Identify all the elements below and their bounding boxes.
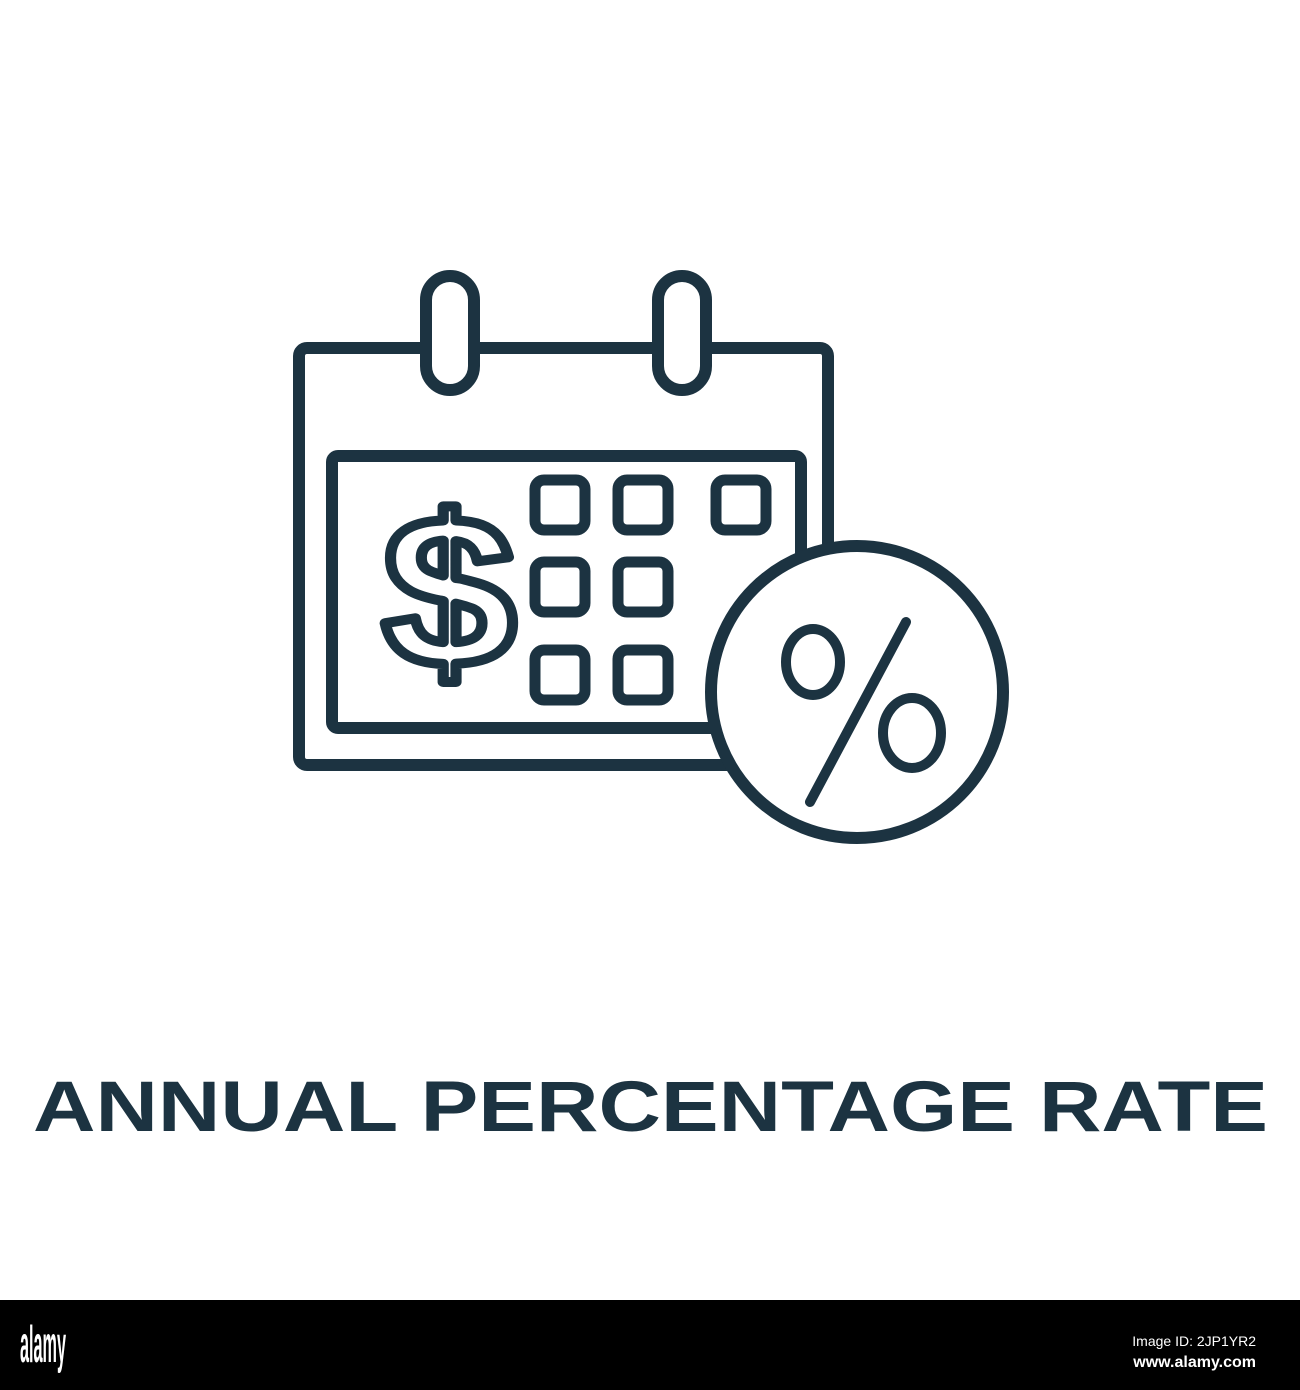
calendar body bbox=[299, 348, 828, 765]
icon: percent circle bbox=[711, 546, 1003, 838]
footer image id: Image ID: 2JP1YR2 bbox=[1132, 1333, 1256, 1349]
calendar inner panel bbox=[332, 456, 801, 728]
icon: dollar sign: $ bbox=[382, 472, 516, 712]
footer bar: alamy bbox=[20, 1316, 66, 1374]
date squares grid bbox=[535, 480, 766, 700]
title: ANNUAL PERCENTAGE RATE bbox=[33, 1068, 1268, 1147]
footer bar bbox=[0, 1300, 1300, 1390]
calendar rings bbox=[426, 276, 706, 390]
footer url: www.alamy.com bbox=[1132, 1354, 1256, 1371]
icon: calendar with dollar and percent bbox=[299, 276, 1003, 838]
